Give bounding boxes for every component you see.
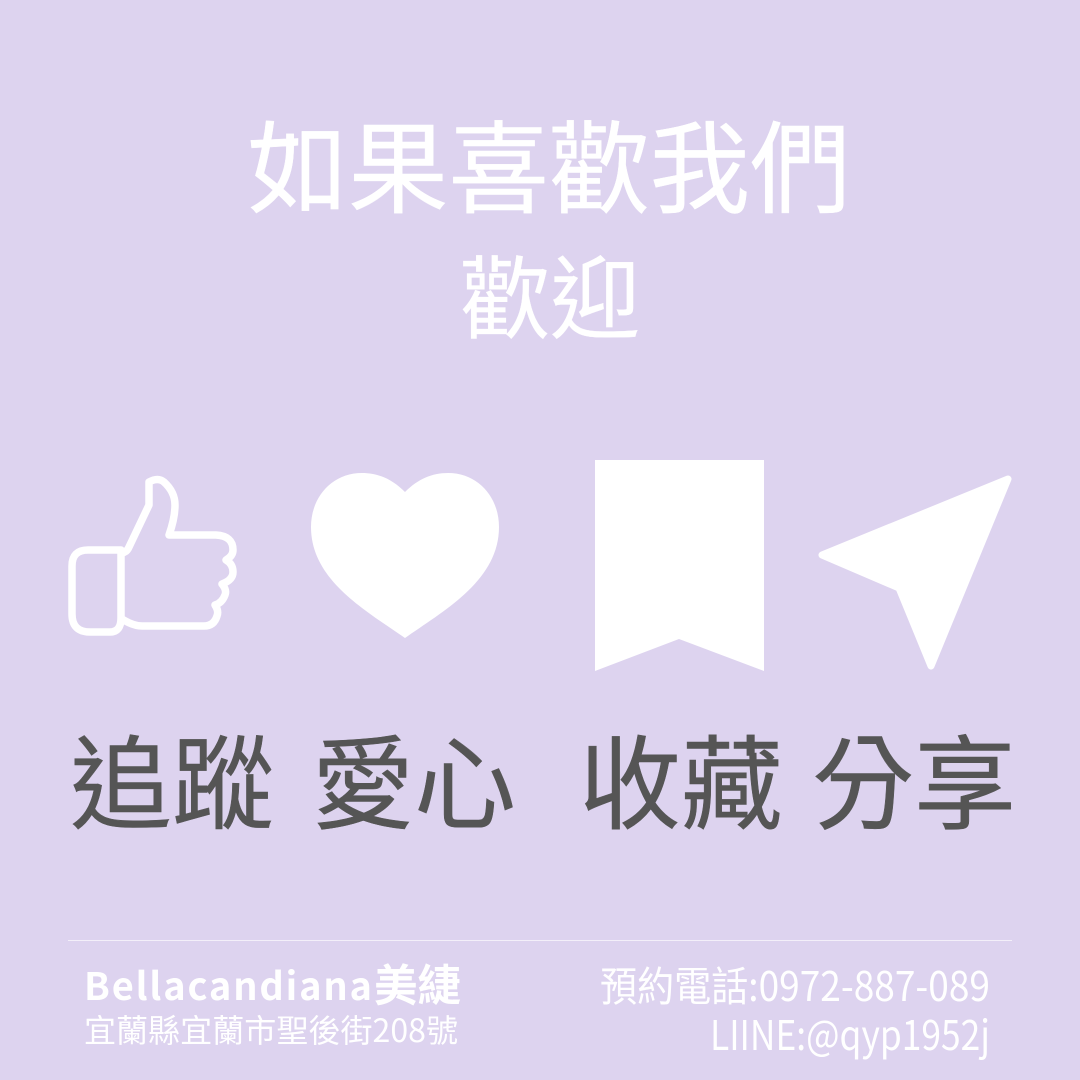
brand name <box>84 950 461 1014</box>
icon: heart <box>311 473 499 638</box>
title: 如果喜歡我們 <box>247 88 851 234</box>
line id: LIINE:@qyp1952j <box>710 1002 990 1062</box>
address: 宜蘭縣宜蘭市聖後街208號 <box>84 1006 458 1052</box>
label: share: 分享 <box>812 704 1016 851</box>
label: love: 愛心 <box>312 704 516 851</box>
phone: 預約電話:0972-887-089 <box>600 953 990 1013</box>
subtitle: 歡迎 <box>460 227 640 357</box>
brand name: 美緁 <box>374 950 461 1014</box>
label: follow: 追蹤 <box>70 704 274 851</box>
brand name: Bellacandiana <box>84 956 372 1011</box>
label: save: 收藏 <box>579 704 783 851</box>
icon: thumbs up <box>72 480 233 632</box>
icon: bookmark <box>595 460 764 671</box>
icon: send arrow <box>822 479 1008 666</box>
